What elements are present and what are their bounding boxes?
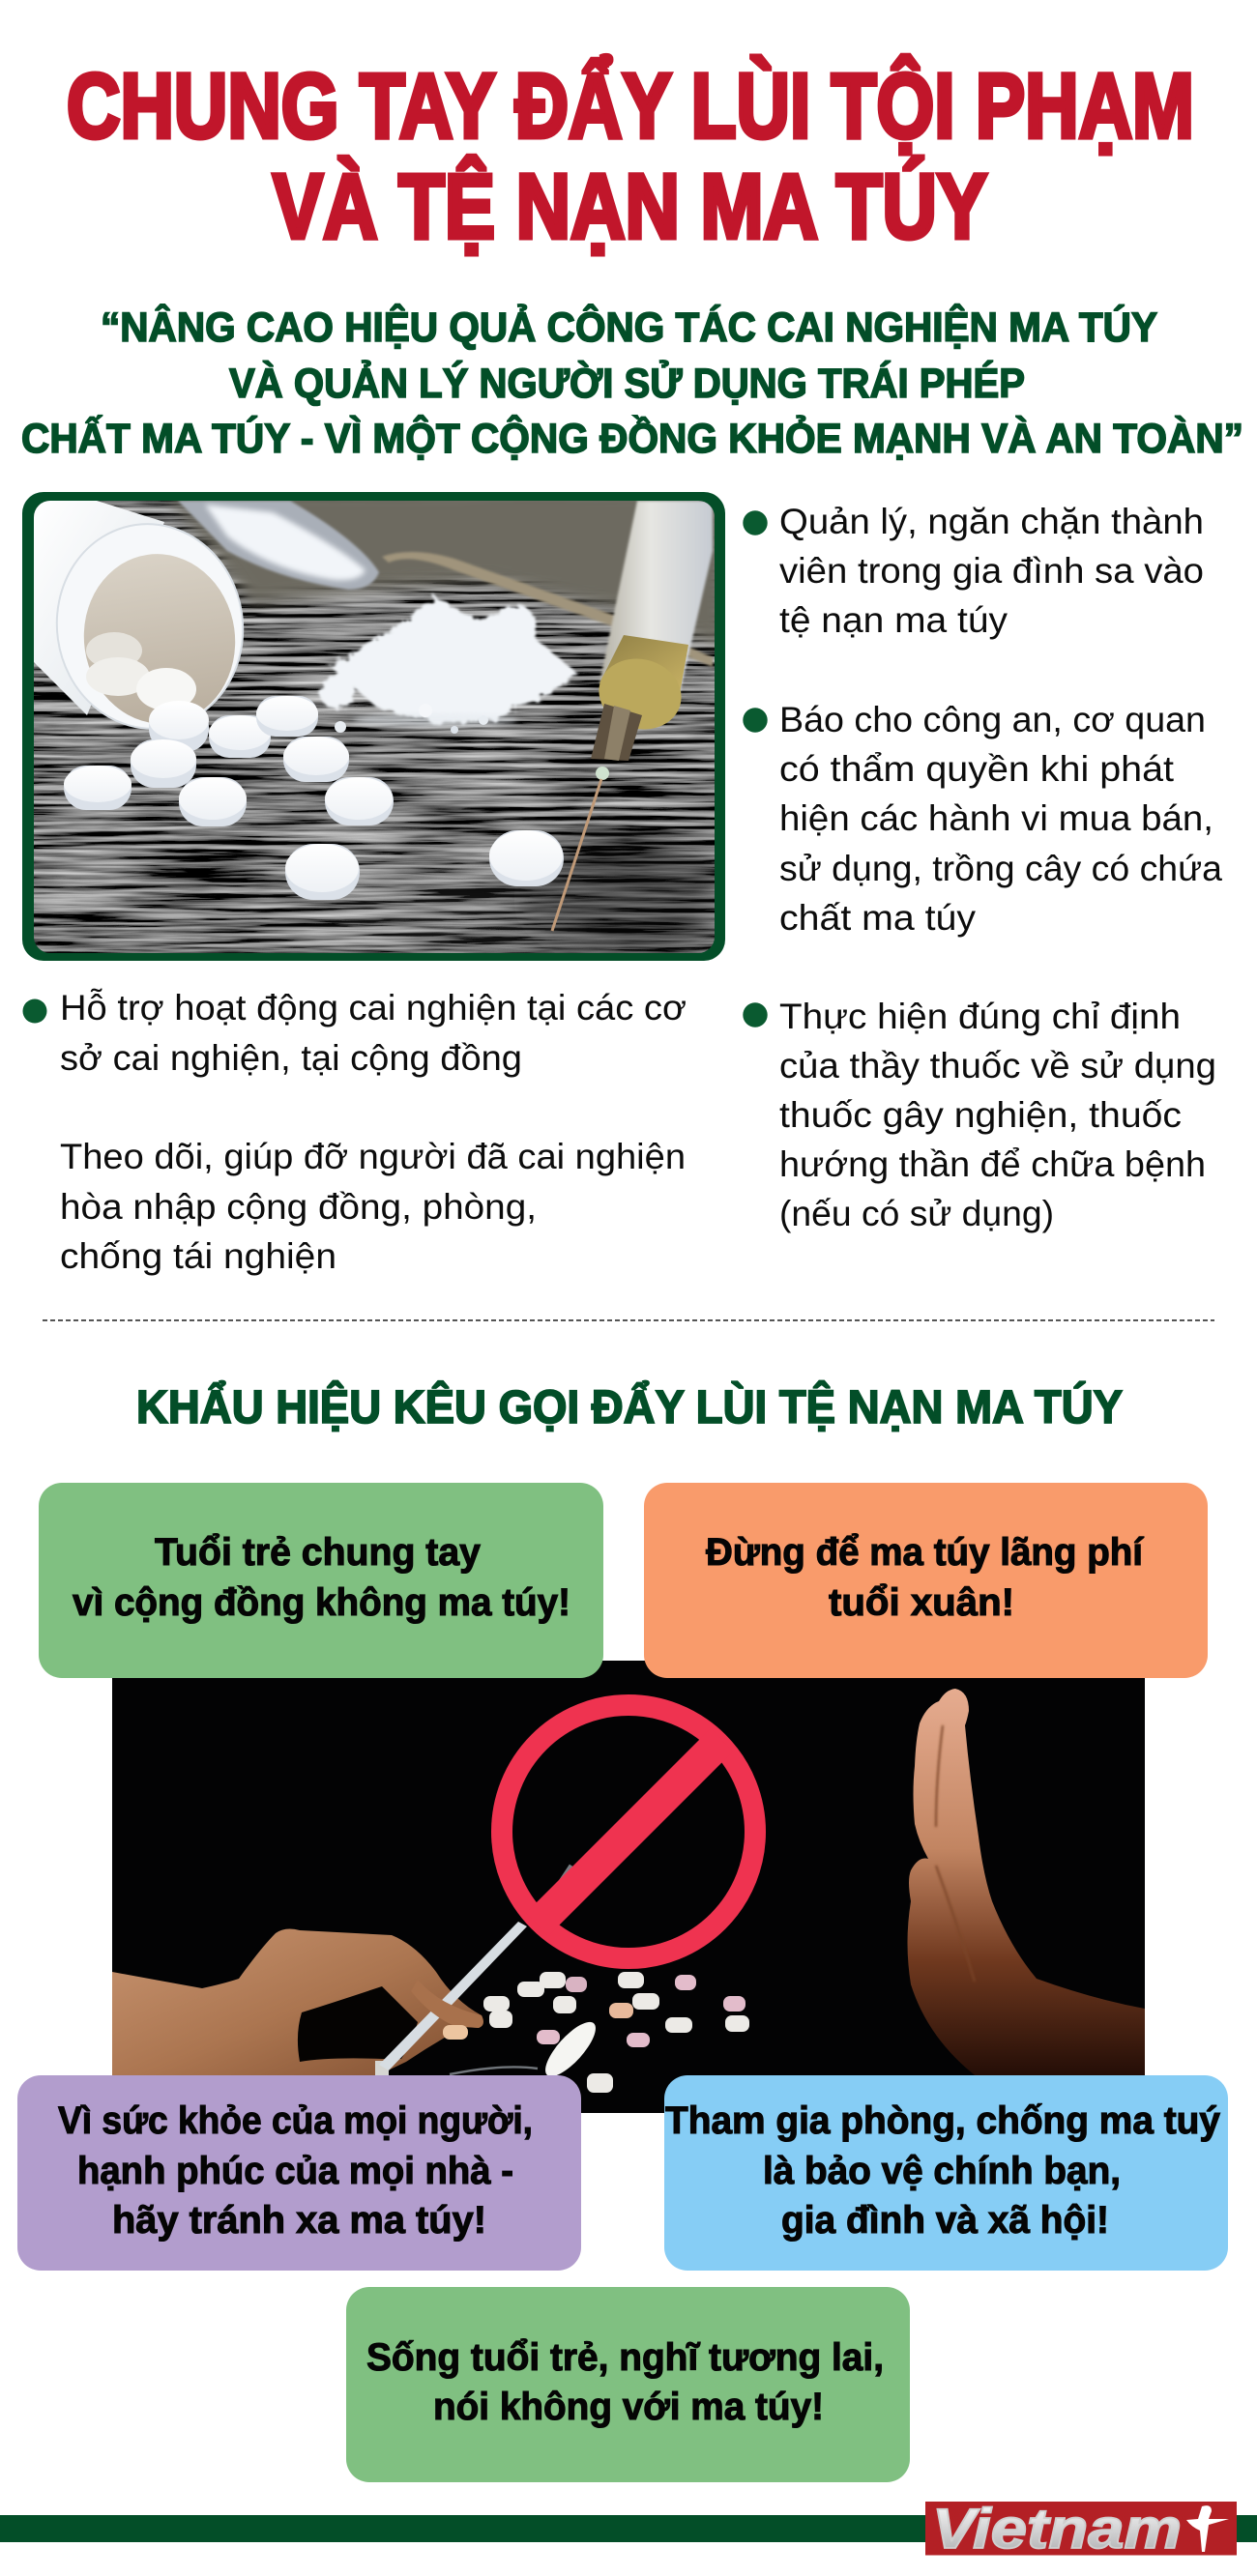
footer bar [0,2515,1257,2542]
photo: pills, powder and syringe [22,488,725,967]
slogan box: purple: hãy tránh xa ma túy! [112,2199,486,2242]
fingers over syringe [415,1989,483,2028]
bullet: Báo cho công an: Báo cho công an, cơ quan [779,700,1206,739]
slogan box: orange: tuổi xuân! [829,1581,1014,1624]
bullet: Hỗ trợ hoạt động cai nghiện [23,988,687,1276]
syringe [552,501,713,931]
spoon [178,501,713,667]
logo: Vietnam+: Vietnam [932,2498,1182,2561]
slogan box: purple [17,2075,581,2271]
slogan box: bottom green [346,2287,910,2482]
pill bottle [34,501,256,740]
bullet: Thực hiện đúng chỉ định: Thực hiện đúng chỉ định [779,997,1181,1036]
bullet: Quản lý: Quản lý, ngăn chặn thành [779,502,1204,541]
bullet: Hỗ trợ hoạt động cai nghiện: hòa nhập cộng đồng, phòng, [60,1187,537,1227]
bullet: Quản lý: tệ nạn ma túy [779,600,1009,640]
bullet: Hỗ trợ hoạt động cai nghiện: Theo dõi, giúp đỡ người đã cai nghiện [60,1137,686,1176]
slogan box: blue [664,2075,1228,2271]
subtitle quote [21,304,1243,462]
slogan box: green: vì cộng đồng không ma túy! [73,1581,570,1624]
slogan heading: KHẨU HIỆU KÊU GỌI ĐẨY LÙI TỆ NẠN MA TÚY [136,1380,1123,1433]
bullet: Quản lý: viên trong gia đình sa vào [779,551,1204,591]
bullet: Hỗ trợ hoạt động cai nghiện: chống tái nghiện [60,1236,336,1276]
bullet: Thực hiện đúng chỉ định: của thầy thuốc về sử dụng [779,1046,1216,1085]
slogan box: orange: Đừng để ma túy lãng phí [706,1531,1145,1574]
syringe barrel [379,1922,527,2070]
bullet: Quản lý [743,502,1204,640]
slogan box: bottom green: nói không với ma túy! [433,2386,824,2428]
slogan box: blue: là bảo vệ chính bạn, [763,2150,1121,2192]
title: VÀ TỆ NẠN MA TÚY [273,156,987,258]
subtitle quote: VÀ QUẢN LÝ NGƯỜI SỬ DỤNG TRÁI PHÉP [229,360,1025,407]
slogan box: green [39,1483,603,1678]
slogan box: blue: gia đình và xã hội! [781,2199,1109,2242]
bullet: Thực hiện đúng chỉ định: hướng thần để chữa bệnh [779,1144,1206,1184]
bullet: Hỗ trợ hoạt động cai nghiện: sở cai nghiện, tại cộng đồng [60,1038,522,1078]
scattered pills [443,1972,749,2093]
right hand stop gesture [907,1689,1145,2088]
bullet: Hỗ trợ hoạt động cai nghiện: Hỗ trợ hoạt động cai nghiện tại các cơ [60,988,687,1028]
no symbol [502,1705,755,1958]
slogan box: bottom green: Sống tuổi trẻ, nghĩ tương lai, [366,2336,884,2379]
bullet: Thực hiện đúng chỉ định [743,997,1216,1233]
slogan box: purple: Vì sức khỏe của mọi người, [58,2099,533,2142]
subtitle quote: “NÂNG CAO HIỆU QUẢ CÔNG TÁC CAI NGHIỆN MA TÚY [101,304,1157,351]
bullet: Báo cho công an: hiện các hành vi mua bán, [779,798,1213,838]
bullet: Báo cho công an: sử dụng, trồng cây có chứa [779,849,1222,888]
photo: refusing drugs on black background [112,1661,1145,2113]
bullet: Báo cho công an: có thẩm quyền khi phát [779,749,1175,789]
slogan box: orange [644,1483,1208,1678]
slogan box: blue: Tham gia phòng, chống ma tuý [665,2099,1221,2142]
logo: Vietnam+ [925,2498,1237,2561]
slogan box: green: Tuổi trẻ chung tay [155,1531,482,1574]
title [67,54,1194,258]
slogan box: purple: hạnh phúc của mọi nhà - [77,2150,513,2192]
bullet: Thực hiện đúng chỉ định: thuốc gây nghiện, thuốc [779,1095,1182,1135]
bullet: Thực hiện đúng chỉ định: (nếu có sử dụng) [779,1194,1054,1233]
scattered white tablets [64,696,564,900]
bullet: Báo cho công an [743,700,1222,938]
white powder pile [320,597,578,734]
left hand holding syringe [112,1929,483,2088]
spoon of powder [449,2022,596,2075]
syringe needle end [559,1864,572,1881]
bullet: Báo cho công an: chất ma túy [779,898,977,938]
